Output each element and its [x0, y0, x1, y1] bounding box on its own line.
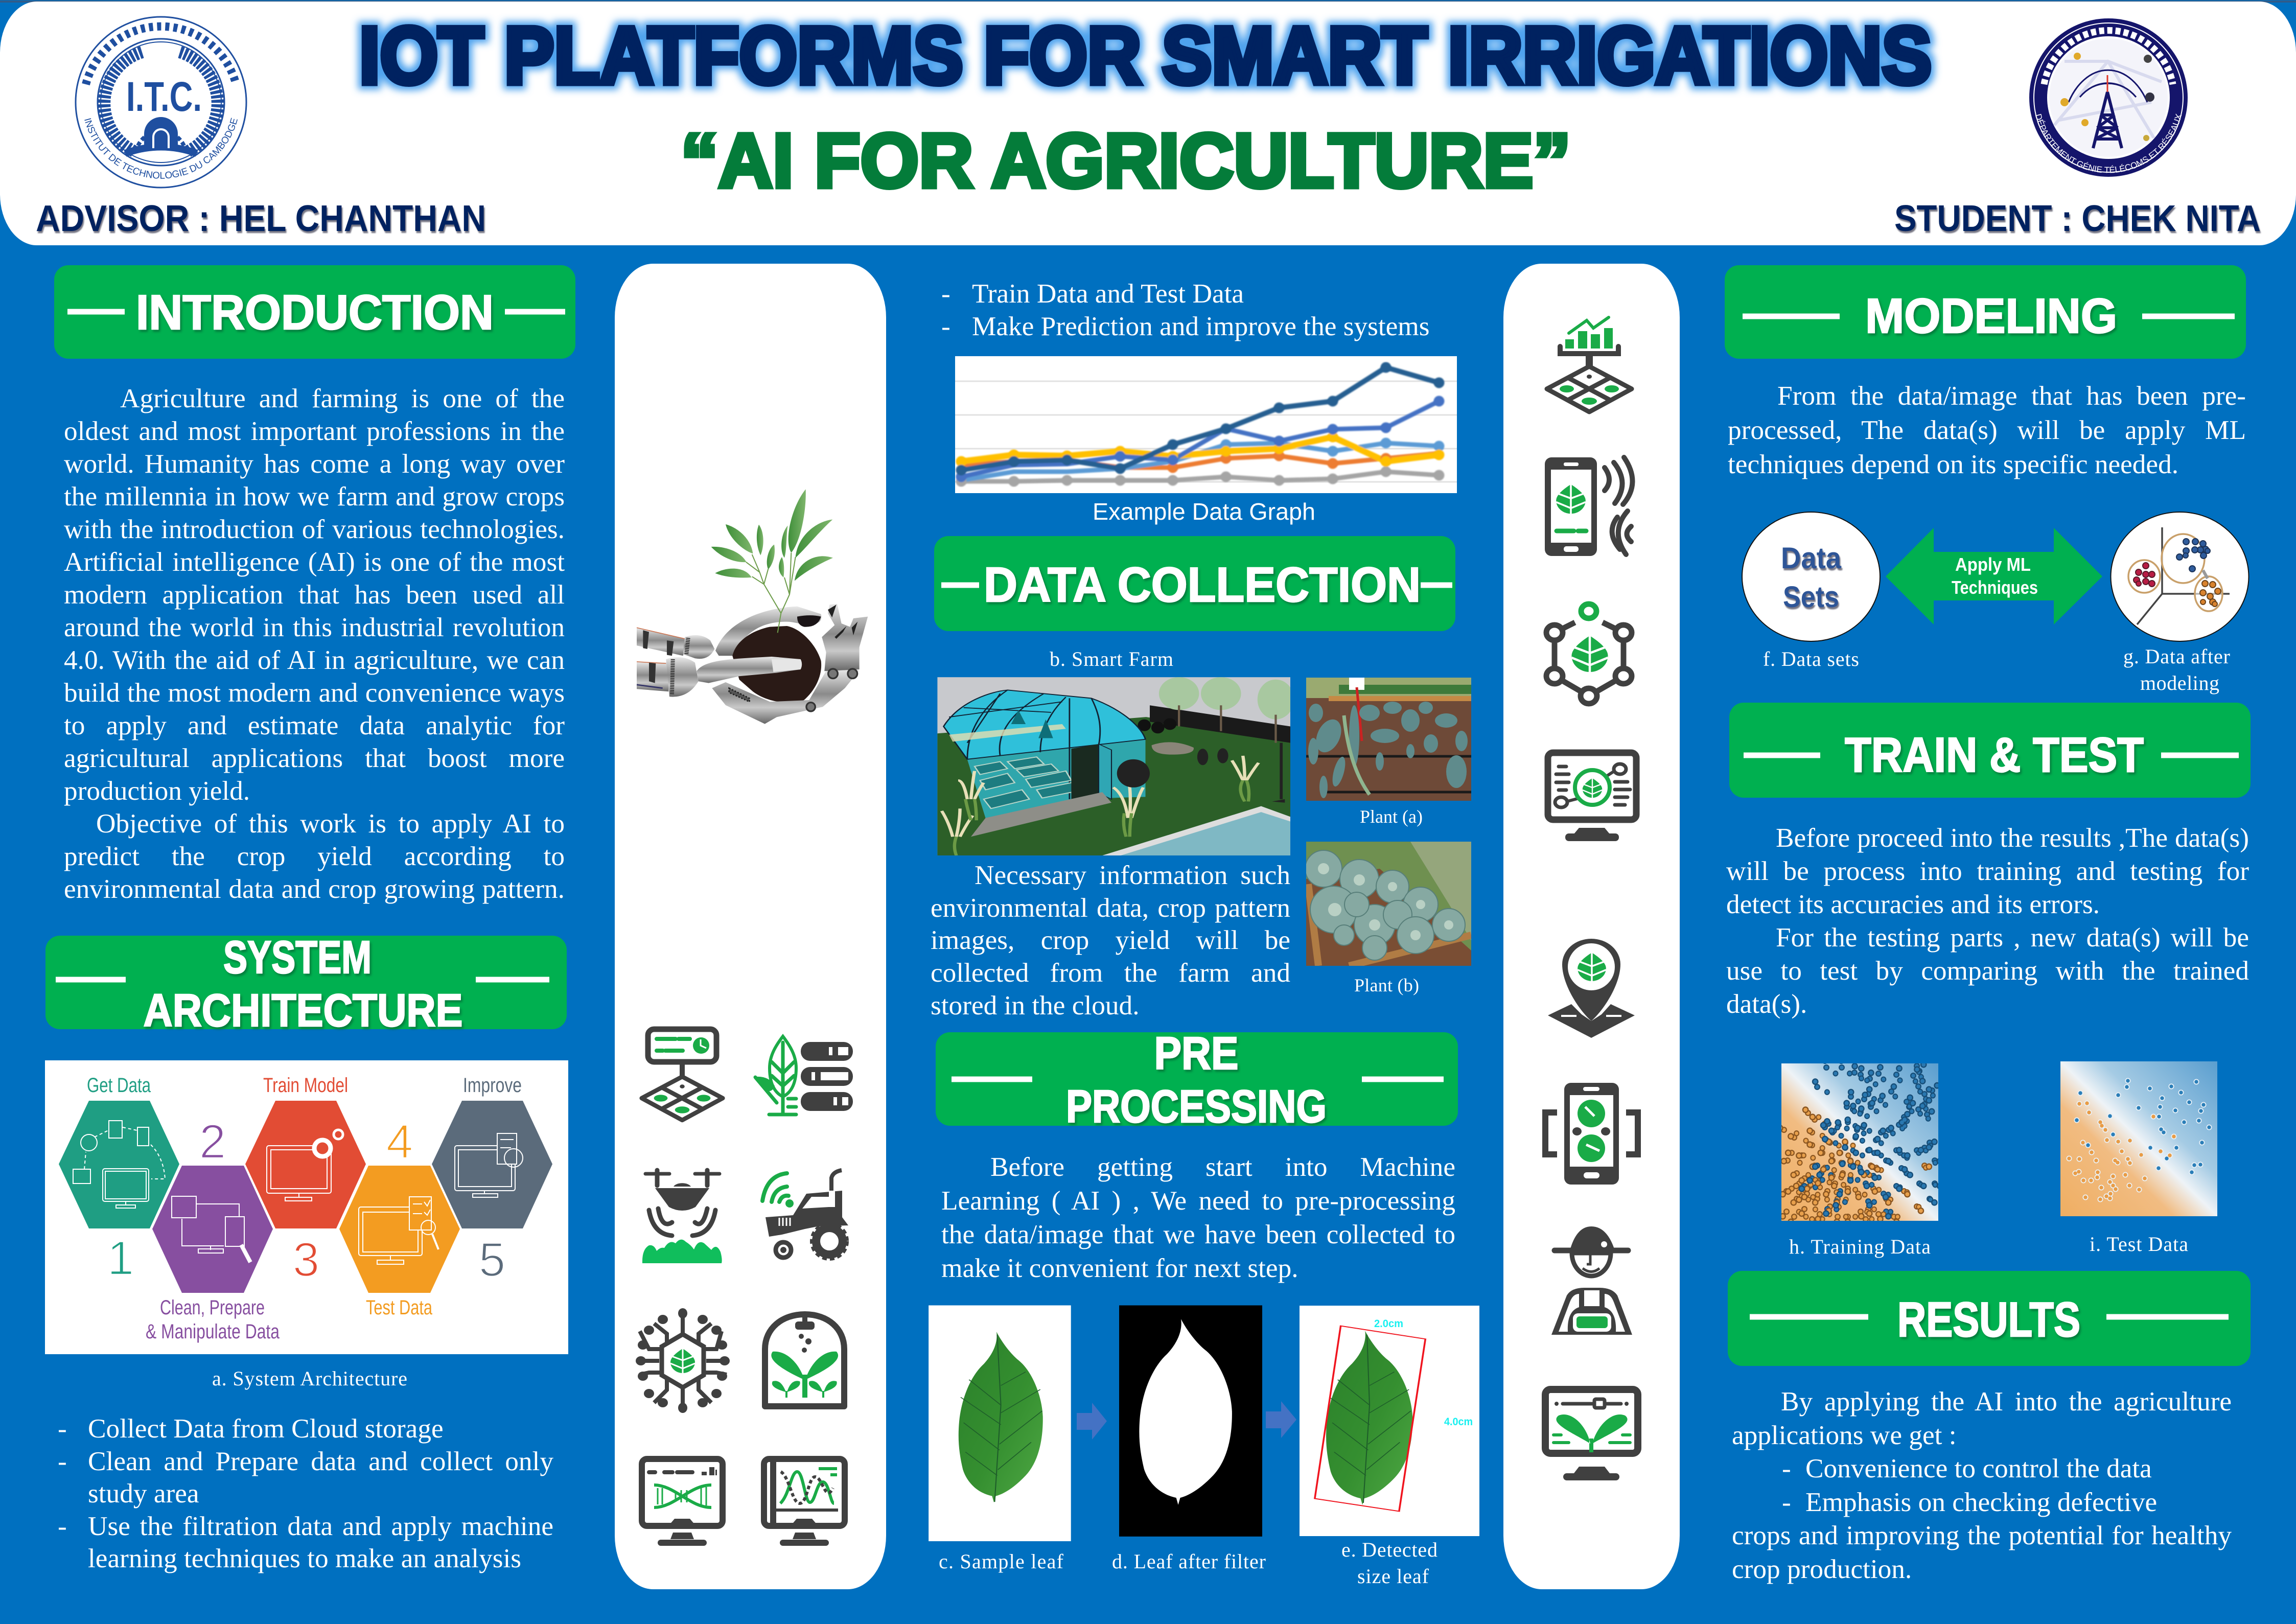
text: introduction: around the world in this industrial revolution [64, 612, 565, 642]
text: introduction: with the introduction of various technologies. [64, 514, 565, 544]
text: introduction: the millennia in how we farm and grow crops [64, 481, 565, 512]
text: results: Convenience to control the data [1805, 1453, 2152, 1483]
arrow c to d [1077, 1403, 1107, 1440]
text: introduction [64, 382, 565, 906]
text: pre processing: make it convenient for next step. [941, 1253, 1298, 1283]
text: pre processing: Learning ( AI ) , We need to pre-processing [941, 1186, 1455, 1216]
heading: results [1728, 1271, 2251, 1366]
text: data collection: Necessary information such [975, 860, 1290, 890]
hexagon numbers: 5 [479, 1233, 505, 1286]
image: leaf after filter [1119, 1305, 1262, 1537]
text: introduction: agricultural applications that boost more [64, 743, 565, 773]
text: pre processing: the data/image that we have been collected to [941, 1219, 1455, 1249]
chart: example data graph [955, 356, 1457, 493]
text: train and test: will be process into training and testing for [1726, 856, 2249, 886]
heading: system architecture: SYSTEM [223, 932, 372, 983]
heading: introduction [54, 265, 575, 359]
hexagon numbers: 2 [199, 1115, 226, 1168]
image: smart farm greenhouse [937, 677, 1294, 855]
main title: IOT PLATFORMS FOR SMART IRRIGATIONS [359, 11, 1932, 101]
hexagon 4: test data [339, 1166, 460, 1293]
caption plant a: Plant (a) [1360, 806, 1423, 827]
image: detected size leaf [1300, 1306, 1479, 1536]
heading: results: RESULTS [1897, 1292, 2080, 1347]
caption e: e. Detected [1341, 1538, 1437, 1561]
text: - [941, 311, 950, 341]
hexagon 1: get data [59, 1101, 179, 1228]
text: data collection: images, crop yield will be [931, 925, 1290, 955]
text: data collection: environmental data, crop pattern [931, 893, 1290, 923]
text: modeling: From the data/image that has been pre- [1777, 381, 2246, 411]
icon: smartphone signal leaf [1545, 457, 1633, 556]
diagram: data sets circle [1742, 512, 1880, 641]
caption d: d. Leaf after filter [1112, 1550, 1266, 1573]
caption plant b: Plant (b) [1354, 975, 1419, 995]
text: train and test: detect its accuracies and its errors. [1726, 889, 2100, 919]
text: train and test: Before proceed into the results ,The data(s) [1776, 823, 2249, 853]
logo: Institut de Technologie du Cambodge: I.T.C. [126, 74, 202, 120]
student name: STUDENT : CHEK NITA [1894, 198, 2261, 239]
text: system architecture steps: learning techniques to make an analysis [88, 1543, 521, 1573]
text: system architecture steps: Clean and Prepare data and collect only [88, 1446, 553, 1476]
text: - [58, 1446, 67, 1476]
arrow: apply ML techniques: Apply ML [1955, 554, 2031, 575]
caption c: c. Sample leaf [939, 1550, 1064, 1573]
caption b: b. Smart Farm [1050, 647, 1173, 670]
illustration: robot hand holding plant [637, 489, 868, 724]
text: system architecture steps: study area [88, 1478, 199, 1509]
caption h: h. Training Data [1789, 1235, 1931, 1258]
advisor name: ADVISOR : HEL CHANTHAN [36, 198, 486, 239]
text: train and test: data(s). [1726, 989, 1807, 1019]
diagram: clustered data circle [2111, 512, 2248, 641]
text: train and predict steps: Make Prediction and improve the systems [972, 311, 1430, 341]
hexagon numbers: 4 [386, 1115, 413, 1168]
text: modeling: techniques depend on its specific needed. [1728, 449, 2178, 479]
icon: leaf network [1546, 604, 1632, 704]
icon: dome greenhouse sprout [765, 1314, 844, 1406]
caption f: f. Data sets [1763, 647, 1859, 670]
text: train and test [1726, 821, 2249, 1020]
heading: modeling [1725, 265, 2246, 359]
text: introduction: Artificial intelligence (AI) is one of the most [64, 547, 565, 577]
hexagon numbers: 1 [107, 1231, 134, 1285]
text: train and test: For the testing parts , new data(s) will be [1776, 922, 2249, 953]
text: modeling [1728, 379, 2246, 481]
text: results: Emphasis on checking defective [1805, 1487, 2157, 1517]
arrow: apply ML techniques: Techniques [1952, 577, 2038, 598]
text: introduction: oldest and most important professions in the [64, 416, 565, 446]
icon: smart tractor [762, 1170, 848, 1259]
icon: DNA monitor [642, 1459, 723, 1546]
caption i: i. Test Data [2090, 1233, 2188, 1256]
icon: smartphone gauges [1545, 1083, 1638, 1185]
text: introduction: modern application that has been used all [64, 579, 565, 610]
chart: test data scatter [2060, 1061, 2217, 1216]
text: results: By applying the AI into the agriculture [1781, 1386, 2232, 1417]
logo: Departement Genie Telecoms et Reseaux [2029, 18, 2188, 177]
icon: drone spraying crops [642, 1170, 722, 1263]
text: - [58, 1413, 67, 1444]
text: introduction: environmental data and crop growing pattern. [64, 874, 565, 904]
header band [0, 1, 2296, 245]
icon: sprout control monitor [1545, 1389, 1638, 1480]
hexagon labels: Test Data [366, 1296, 433, 1319]
icon: leaf circuit chip [636, 1308, 730, 1413]
text: introduction: 4.0. With the aid of AI in agriculture, we can [64, 645, 565, 675]
arrow: apply ML techniques [1886, 528, 2102, 624]
subtitle: “AI FOR AGRICULTURE” [681, 118, 1571, 203]
image: sample leaf [929, 1305, 1071, 1541]
text: results [1732, 1385, 2232, 1586]
hexagon labels: & Manipulate Data [146, 1320, 280, 1343]
hexagon 5: improve [432, 1101, 552, 1228]
hexagon 3: train model [245, 1101, 366, 1228]
text: introduction: build the most modern and convenience ways [64, 678, 565, 708]
logo: Departement Genie Telecoms et Reseaux: DÉPARTEMENT GÉNIE TÉLÉCOMS ET RÉSEAUX [2035, 113, 2182, 173]
heading: pre processing [936, 1028, 1458, 1132]
icon: farmer [1551, 1226, 1632, 1335]
icon: field monitor with clock [642, 1029, 723, 1120]
hexagon numbers: 3 [293, 1233, 319, 1286]
caption: example data graph: Example Data Graph [1093, 498, 1315, 525]
text: data collection: stored in the cloud. [931, 990, 1140, 1020]
icon: leaf analysis monitor [1548, 753, 1636, 841]
hexagon numbers [107, 1115, 505, 1286]
heading: data collection [934, 536, 1455, 631]
text: introduction: Objective of this work is to apply AI to [96, 808, 565, 839]
heading: pre processing: PRE [1154, 1028, 1239, 1079]
text: introduction: Agriculture and farming is one of the [120, 383, 565, 413]
panel: left white column [615, 264, 886, 1589]
chart: training data scatter [1780, 1059, 1940, 1224]
icon: waveform monitor [764, 1459, 845, 1546]
text: introduction: predict the crop yield according to [64, 841, 565, 871]
image: plant (a) [1306, 678, 1471, 801]
text: results: crops and improving the potential for healthy [1732, 1520, 2232, 1550]
text: results: - [1782, 1487, 1791, 1517]
logo: Institut de Technologie du Cambodge [76, 17, 246, 188]
text: - [58, 1511, 67, 1541]
arrow d to e [1266, 1401, 1296, 1438]
chart: system architecture hexagons [45, 1060, 568, 1354]
text: data collection: collected from the farm and [931, 958, 1290, 988]
hexagon labels: Improve [463, 1074, 522, 1097]
image: plant (b) [1305, 842, 1471, 966]
diagram: data sets circle: Data [1781, 542, 1842, 575]
heading: data collection: DATA COLLECTION [984, 558, 1421, 612]
hexagon labels: Train Model [263, 1074, 348, 1097]
heading: train and test: TRAIN & TEST [1845, 728, 2144, 782]
heading: system architecture [45, 932, 567, 1036]
hexagon 2: clean and prepare [152, 1166, 273, 1293]
hexagon labels: Clean, Prepare [160, 1296, 265, 1319]
text: train and predict steps: Train Data and Test Data [972, 279, 1244, 309]
panel: right white column [1503, 264, 1680, 1589]
heading: pre processing: PROCESSING [1066, 1081, 1327, 1132]
text: modeling: processed, The data(s) will be apply ML [1728, 415, 2246, 445]
hexagon labels [87, 1074, 522, 1343]
caption e [1341, 1538, 1437, 1588]
text: results: - [1782, 1453, 1791, 1483]
caption g [2123, 645, 2230, 694]
text: train and predict steps [972, 277, 1457, 343]
text: pre processing: Before getting start into Machine [990, 1152, 1455, 1182]
caption e: size leaf [1357, 1565, 1429, 1588]
text: data collection [931, 859, 1290, 1022]
heading: train and test [1729, 703, 2251, 798]
caption g: modeling [2140, 671, 2219, 694]
hexagon labels: Get Data [87, 1074, 151, 1097]
heading: introduction: INTRODUCTION [136, 285, 494, 340]
text: system architecture steps: Collect Data from Cloud storage [88, 1413, 444, 1444]
caption a: a. System Architecture [212, 1367, 407, 1390]
image: detected size leaf: 2.0cm [1374, 1318, 1403, 1330]
text: train and test: use to test by comparing with the trained [1726, 956, 2249, 986]
caption g: g. Data after [2123, 645, 2230, 668]
text: introduction: production yield. [64, 776, 250, 806]
text: pre processing [941, 1150, 1455, 1285]
icon: location pin leaf [1548, 939, 1635, 1038]
image: detected size leaf: 4.0cm [1444, 1416, 1473, 1428]
text: results: applications we get : [1732, 1420, 1957, 1450]
text: system architecture steps [88, 1412, 553, 1575]
text: results: crop production. [1732, 1553, 1912, 1584]
text: system architecture steps: Use the filtration data and apply machine [88, 1511, 553, 1541]
icon: field chart [1547, 317, 1632, 412]
text: introduction: to apply and estimate data analytic for [64, 710, 565, 740]
heading: modeling: MODELING [1865, 289, 2117, 343]
diagram: data sets circle: Sets [1783, 581, 1839, 614]
heading: system architecture: ARCHITECTURE [143, 985, 463, 1036]
logo: Institut de Technologie du Cambodge: INSTITUT DE TECHNOLOGIE DU CAMBODGE [84, 118, 238, 179]
text: - [941, 279, 950, 309]
text: introduction: world. Humanity has come a long way over [64, 449, 565, 479]
icon: plant and servers [755, 1036, 853, 1115]
